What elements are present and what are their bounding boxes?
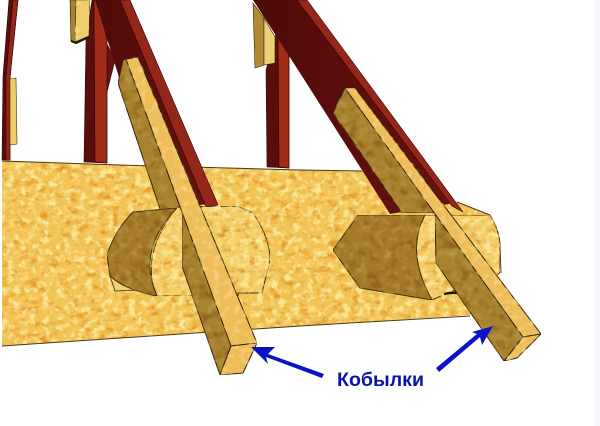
post: second — [70, 0, 115, 163]
right kobylka board: upper side face — [333, 88, 435, 213]
left rafter — [95, 0, 218, 210]
right rafter — [253, 0, 463, 214]
log — [2, 161, 501, 346]
post: far left — [2, 0, 18, 160]
left kobylka board: upper side face — [118, 59, 182, 212]
right notch — [333, 215, 500, 300]
small board on far left post — [10, 78, 17, 145]
left kobylka board: lower and top face — [126, 57, 257, 375]
label: Кобылки: Кобылки — [337, 370, 424, 391]
board on third post — [253, 3, 275, 68]
board on second post — [70, 0, 90, 43]
notch: shadowed crescent — [107, 208, 177, 296]
left notch — [107, 206, 270, 296]
notch: cream cut face — [416, 215, 500, 300]
right kobylka board: lower and top face — [345, 88, 541, 361]
arrow: left — [251, 347, 324, 378]
post: third — [253, 3, 289, 168]
notch: shadowed body — [333, 215, 432, 300]
notch: cream cut face — [151, 206, 270, 296]
arrow: right — [436, 326, 493, 372]
notch: lower facet — [110, 276, 140, 291]
